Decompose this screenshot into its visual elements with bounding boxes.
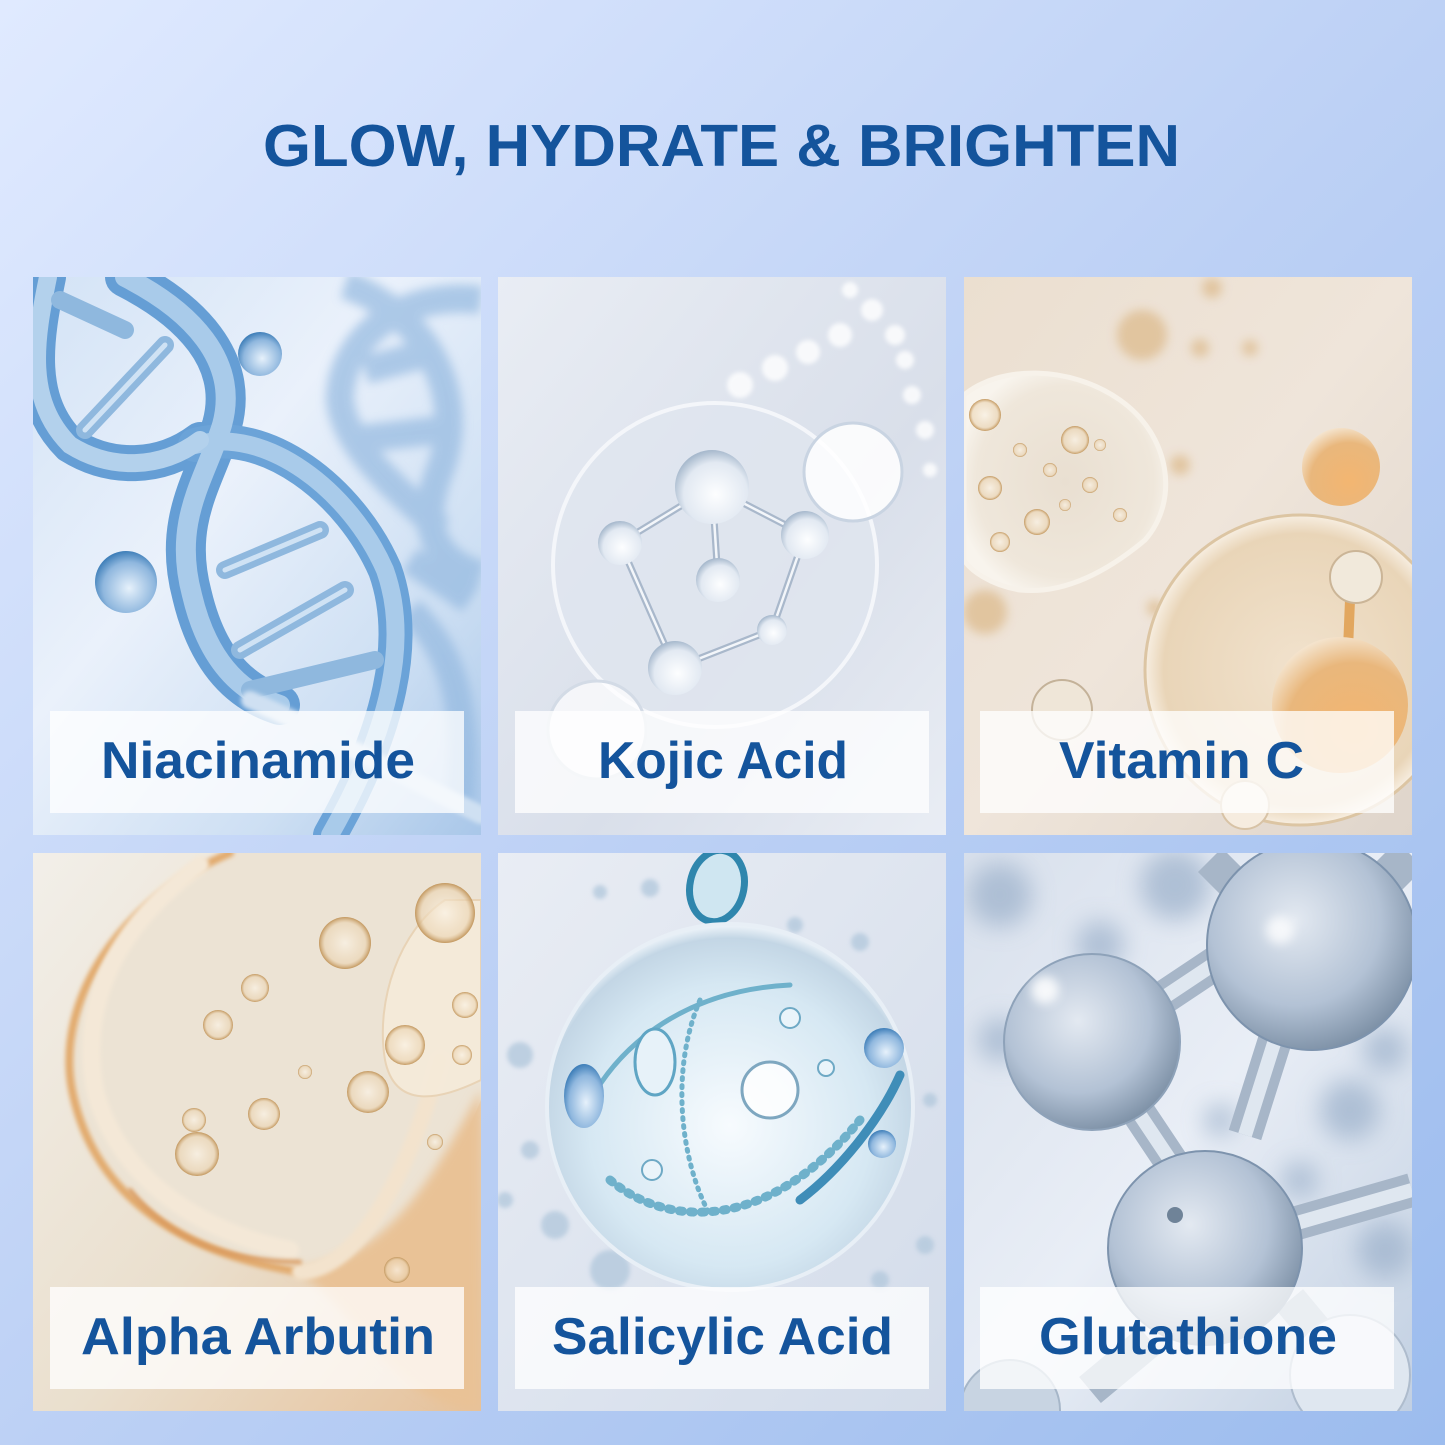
panel: Salicylic Acid <box>497 845 946 1411</box>
label: Niacinamide <box>101 732 415 790</box>
panel: Kojic Acid <box>498 277 946 835</box>
panel: Glutathione <box>960 840 1417 1445</box>
label box <box>515 1287 929 1389</box>
molecule in bubble illustration <box>498 277 946 835</box>
label: Vitamin C <box>1059 732 1304 790</box>
cream serum swirl illustration <box>33 853 481 1411</box>
label: Glutathione <box>1039 1308 1337 1366</box>
label box <box>50 1287 464 1389</box>
panel: Alpha Arbutin <box>33 853 481 1411</box>
label box <box>515 711 929 813</box>
panel: Vitamin C <box>963 277 1445 835</box>
label box <box>50 711 464 813</box>
label box <box>980 1287 1394 1389</box>
glass molecule illustration <box>960 840 1417 1445</box>
label: Kojic Acid <box>598 732 848 790</box>
panel: Niacinamide <box>33 277 481 835</box>
title: GLOW, HYDRATE & BRIGHTEN <box>263 113 1180 179</box>
water sphere illustration <box>497 845 946 1411</box>
label: Alpha Arbutin <box>81 1308 435 1366</box>
label box <box>980 711 1394 813</box>
golden oil bubbles illustration <box>963 277 1445 835</box>
DNA helix illustration <box>33 277 481 835</box>
label: Salicylic Acid <box>552 1308 893 1366</box>
